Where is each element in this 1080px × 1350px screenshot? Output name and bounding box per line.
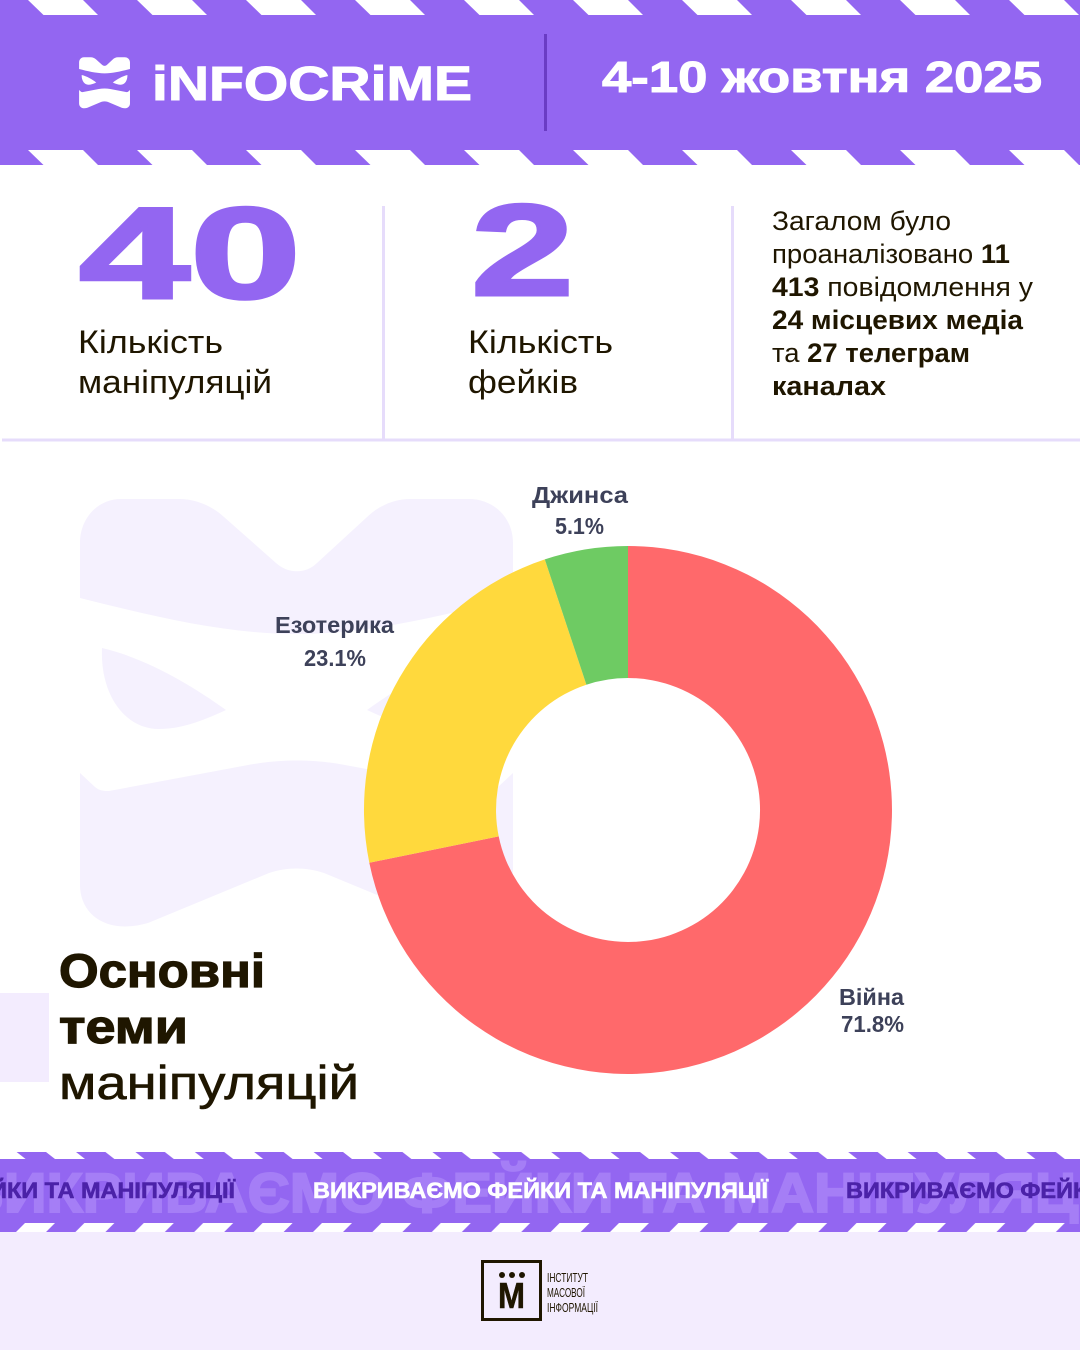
header divider [544,34,547,131]
text block: analysis summary [772,206,1034,401]
heading accent block [0,993,49,1082]
stat: manipulations count: 40 [79,180,301,326]
ticker band [0,1152,1080,1232]
label: advertorial: Джинса [532,482,628,508]
stat label: fakes: фейків [468,364,578,400]
header band [0,0,1080,165]
label: esoterics [275,612,394,671]
label: war: 71.8% [841,1011,904,1037]
text block: analysis summary: Загалом було [772,206,951,236]
stat label: manipulations: Кількість [78,324,223,360]
slice: advertorial 5.1% [545,546,628,685]
text block: analysis summary: проаналізовано 11 [772,239,1010,269]
institute name [547,1270,598,1315]
label: esoterics: 23.1% [304,645,366,671]
icon: institute mark: М [498,1275,525,1316]
institute name: ІНФОРМАЦІЇ [547,1300,598,1315]
donut chart [364,546,892,1074]
text block: analysis summary: та 27 телеграм [772,338,970,368]
chart heading: теми [59,1000,188,1053]
background logo watermark [80,499,513,926]
logo wordmark: iNFOCRiME [152,58,472,111]
text block: analysis summary: 24 місцевих медіа [772,305,1024,335]
text block: analysis summary: 413 повідомлення у [772,272,1034,302]
stats dividers [2,206,1080,442]
chart heading: Основні [59,944,265,997]
stat label: manipulations: маніпуляцій [78,364,272,400]
label: war: Війна [839,984,904,1010]
institute name: МАСОВОЇ [547,1285,585,1300]
stat label: fakes: Кількість [468,324,613,360]
label: advertorial [532,482,628,539]
text block: analysis summary: каналах [772,371,886,401]
stat: fakes count: 2 [471,177,574,323]
slice: esoterics 23.1% [364,559,586,863]
label: advertorial: 5.1% [555,513,604,539]
slice: war 71.8% [369,546,892,1074]
ticker text white: ВИКРИВАЄМО ФЕЙКИ ТА МАНІПУЛЯЦІЇ [313,1178,769,1203]
institute name: ІНСТИТУТ [547,1270,588,1285]
footer panel [0,1232,1080,1350]
chart heading [59,944,359,1109]
label: war [839,984,904,1037]
icon: infocrime logo mark [79,57,130,108]
date range: 4-10 жовтня 2025 [602,53,1042,102]
institute logo [482,1262,598,1320]
stat: manipulations count [78,180,301,400]
chart heading: маніпуляцій [59,1056,359,1109]
label: esoterics: Езотерика [275,612,394,638]
stat: fakes count [468,177,613,400]
